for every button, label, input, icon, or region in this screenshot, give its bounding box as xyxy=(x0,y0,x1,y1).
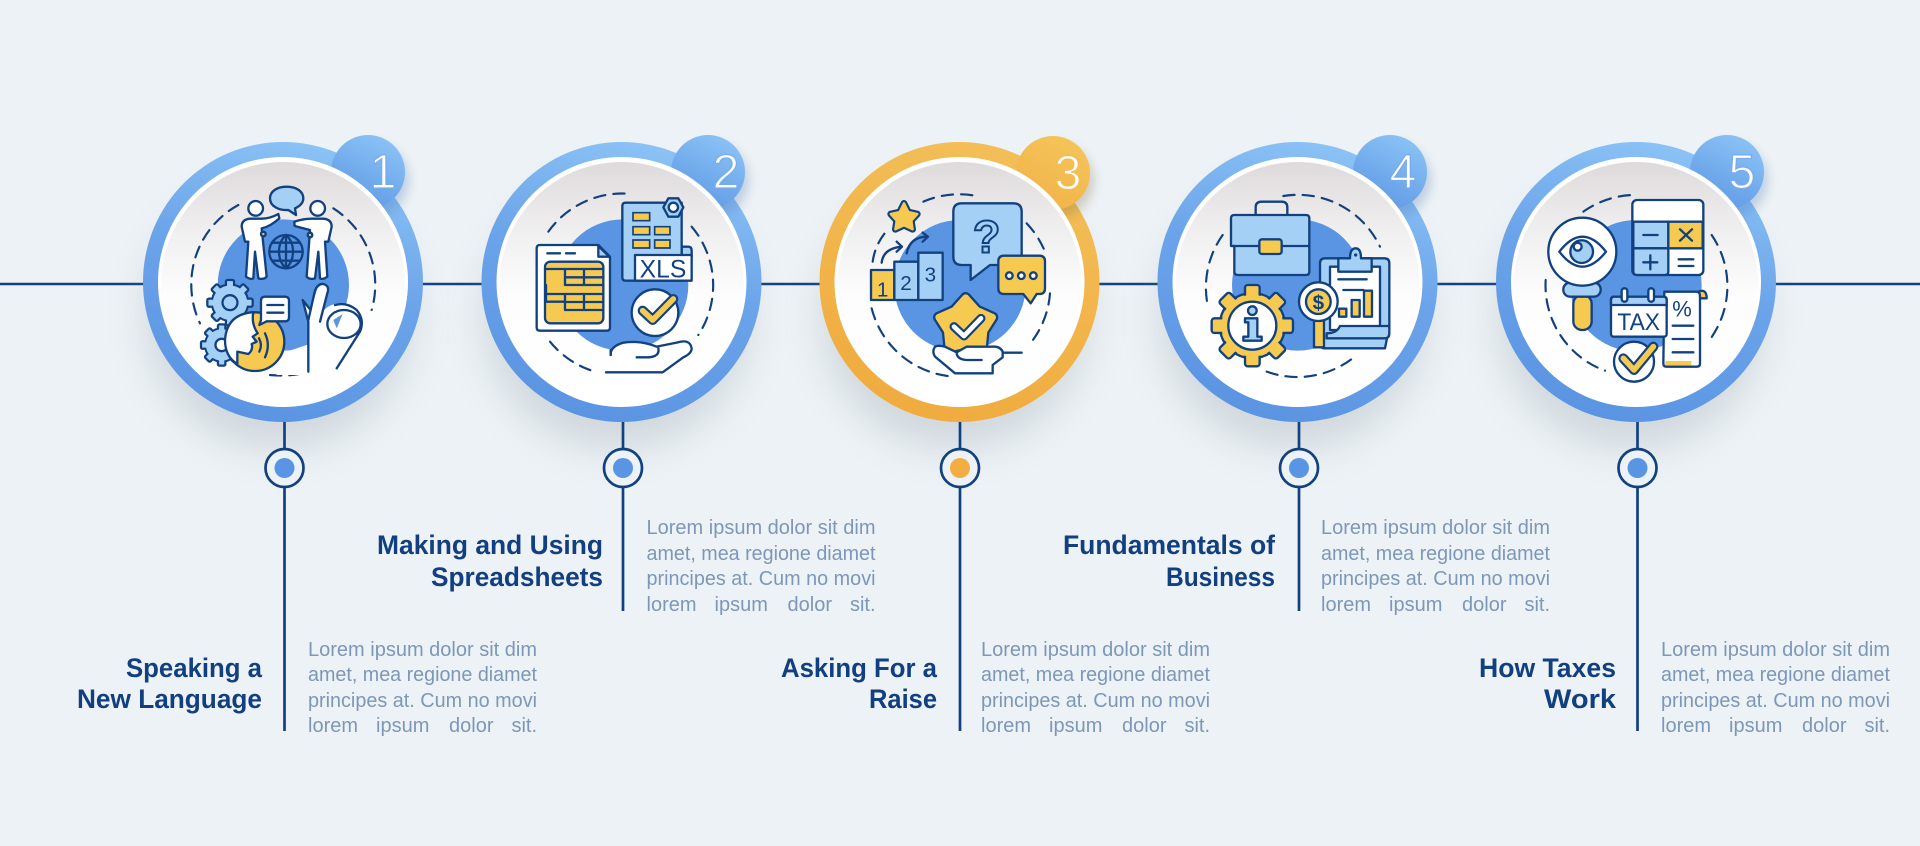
body text: principes at. Cum no movi xyxy=(646,568,876,590)
icon: asking for a raise: ? xyxy=(973,212,1000,263)
body text xyxy=(1321,517,1550,616)
body text: Lorem ipsum dolor sit dim xyxy=(1661,639,1890,661)
heading xyxy=(1063,530,1276,592)
body text: amet, mea regione diamet xyxy=(981,664,1210,686)
heading: Business xyxy=(1166,562,1275,592)
icon: business fundamentals: $ xyxy=(1313,292,1325,315)
timeline: horizontal connector xyxy=(0,283,1920,285)
timeline marker xyxy=(1280,449,1318,487)
inner disc xyxy=(496,157,746,407)
ring xyxy=(1496,142,1776,422)
body text: dolor xyxy=(1122,715,1167,737)
body text: dolor xyxy=(788,594,832,616)
body text xyxy=(1661,639,1890,737)
heading: Spreadsheets xyxy=(431,562,603,592)
inner disc xyxy=(1511,157,1761,407)
body text: ipsum xyxy=(1729,715,1782,737)
body text: lorem xyxy=(1661,715,1711,737)
body text: principes at. Cum no movi xyxy=(981,690,1210,712)
body text: principes at. Cum no movi xyxy=(308,690,537,712)
heading: How Taxes xyxy=(1479,653,1616,683)
icon: asking for a raise: 3 xyxy=(925,264,936,287)
body text: sit. xyxy=(511,715,537,737)
icon: taxes: TAX xyxy=(1617,309,1660,336)
body text: sit. xyxy=(1524,594,1550,616)
timeline marker xyxy=(941,449,979,487)
heading: Raise xyxy=(869,684,937,714)
inner disc xyxy=(834,157,1084,407)
connector: vertical line xyxy=(283,422,286,731)
number badge: 5 xyxy=(1729,146,1755,199)
body text: amet, mea regione diamet xyxy=(1661,664,1890,686)
body text: amet, mea regione diamet xyxy=(308,664,537,686)
heading xyxy=(77,653,263,714)
body text: ipsum xyxy=(714,594,768,616)
number badge xyxy=(331,135,409,217)
heading: Fundamentals of xyxy=(1063,530,1276,560)
icon: asking for a raise: 2 xyxy=(900,272,912,295)
ring xyxy=(482,142,762,422)
heading xyxy=(781,653,938,714)
connector: vertical line xyxy=(1298,422,1300,611)
number badge: 4 xyxy=(1390,146,1416,199)
ring xyxy=(143,142,423,422)
body text: lorem xyxy=(646,594,697,616)
number badge: 1 xyxy=(370,146,396,199)
timeline marker xyxy=(1618,449,1656,487)
icon: spreadsheets: XLS xyxy=(640,256,686,283)
icon: language communication xyxy=(191,187,375,376)
inner disc xyxy=(158,157,408,407)
body text xyxy=(646,517,876,616)
heading: New Language xyxy=(77,684,262,714)
body text: sit. xyxy=(1184,715,1210,737)
heading xyxy=(1479,653,1617,714)
icon: spreadsheets xyxy=(537,194,713,373)
number badge: 2 xyxy=(713,146,739,199)
ring xyxy=(1158,142,1438,422)
inner disc xyxy=(1172,157,1422,407)
step 4: Fundamentals of Business xyxy=(1063,135,1550,616)
body text xyxy=(308,639,537,737)
step 1: Speaking a New Language xyxy=(77,135,537,737)
step 3: Asking For a Raise xyxy=(781,136,1210,737)
number badge xyxy=(1353,135,1431,217)
heading xyxy=(377,530,603,592)
body text: dolor xyxy=(1802,715,1847,737)
number badge: 3 xyxy=(1055,147,1081,200)
icon: asking for a raise xyxy=(871,194,1050,377)
body text: ipsum xyxy=(376,715,429,737)
body text: amet, mea regione diamet xyxy=(1321,543,1550,565)
body text: lorem xyxy=(981,715,1031,737)
body text: sit. xyxy=(1864,715,1890,737)
number badge xyxy=(671,135,749,217)
heading: Making and Using xyxy=(377,530,603,560)
body text: principes at. Cum no movi xyxy=(1321,568,1550,590)
body text: Lorem ipsum dolor sit dim xyxy=(981,639,1210,661)
body text: ipsum xyxy=(1049,715,1102,737)
heading: Asking For a xyxy=(781,653,938,683)
heading: Speaking a xyxy=(126,653,263,683)
ring xyxy=(820,142,1100,422)
icon: taxes: % xyxy=(1672,297,1692,322)
number badge xyxy=(1690,135,1768,217)
connector: vertical line xyxy=(959,422,961,731)
body text: amet, mea regione diamet xyxy=(646,543,876,565)
timeline marker xyxy=(266,449,304,487)
step 5: How Taxes Work xyxy=(1479,135,1890,737)
step 2: Making and Using Spreadsheets xyxy=(377,135,876,616)
body text: Lorem ipsum dolor sit dim xyxy=(1321,517,1550,539)
body text xyxy=(981,639,1210,737)
body text: ipsum xyxy=(1389,594,1442,616)
number badge xyxy=(1016,136,1094,218)
body text: principes at. Cum no movi xyxy=(1661,690,1890,712)
body text: sit. xyxy=(850,594,876,616)
body text: lorem xyxy=(308,715,358,737)
heading: Work xyxy=(1544,684,1617,714)
connector: vertical line xyxy=(1636,422,1639,731)
icon: asking for a raise: 1 xyxy=(877,279,888,302)
timeline marker xyxy=(604,449,642,487)
body text: dolor xyxy=(1462,594,1507,616)
connector: vertical line xyxy=(622,422,624,611)
body text: Lorem ipsum dolor sit dim xyxy=(308,639,537,661)
body text: dolor xyxy=(449,715,494,737)
body text: lorem xyxy=(1321,594,1371,616)
body text: Lorem ipsum dolor sit dim xyxy=(646,517,876,539)
icon: business fundamentals xyxy=(1206,195,1389,377)
icon: taxes xyxy=(1545,195,1727,382)
